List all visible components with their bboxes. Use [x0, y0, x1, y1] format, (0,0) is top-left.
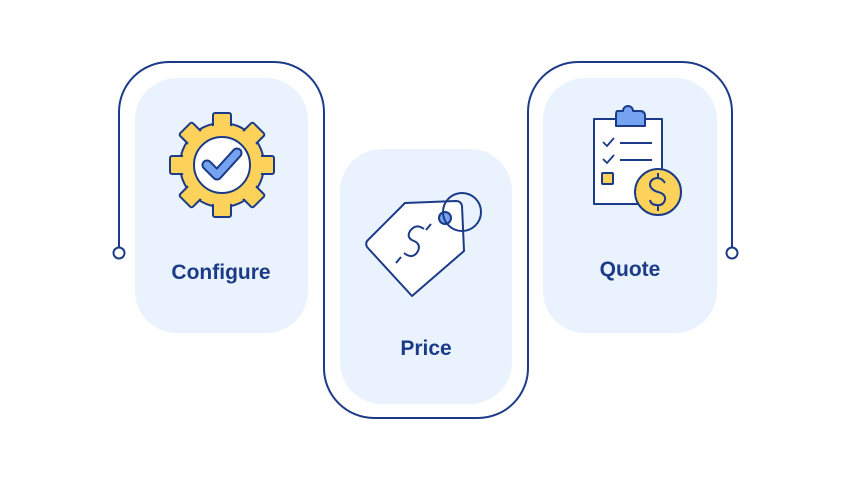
- heading: Configure: Configure: [171, 261, 271, 284]
- panel: price card: [340, 149, 512, 404]
- connector end dot right: [726, 248, 738, 258]
- heading: Quote: Quote: [600, 258, 660, 281]
- icon: price tag: [366, 193, 481, 296]
- panel: quote card: [543, 78, 717, 333]
- connector end dot left: [114, 248, 124, 258]
- icon: gear with check: [170, 113, 274, 217]
- panel: configure card: [135, 78, 308, 333]
- connector outline: [119, 62, 732, 418]
- heading: Price: Price: [400, 337, 452, 360]
- icon: clipboard quote: [594, 106, 681, 215]
